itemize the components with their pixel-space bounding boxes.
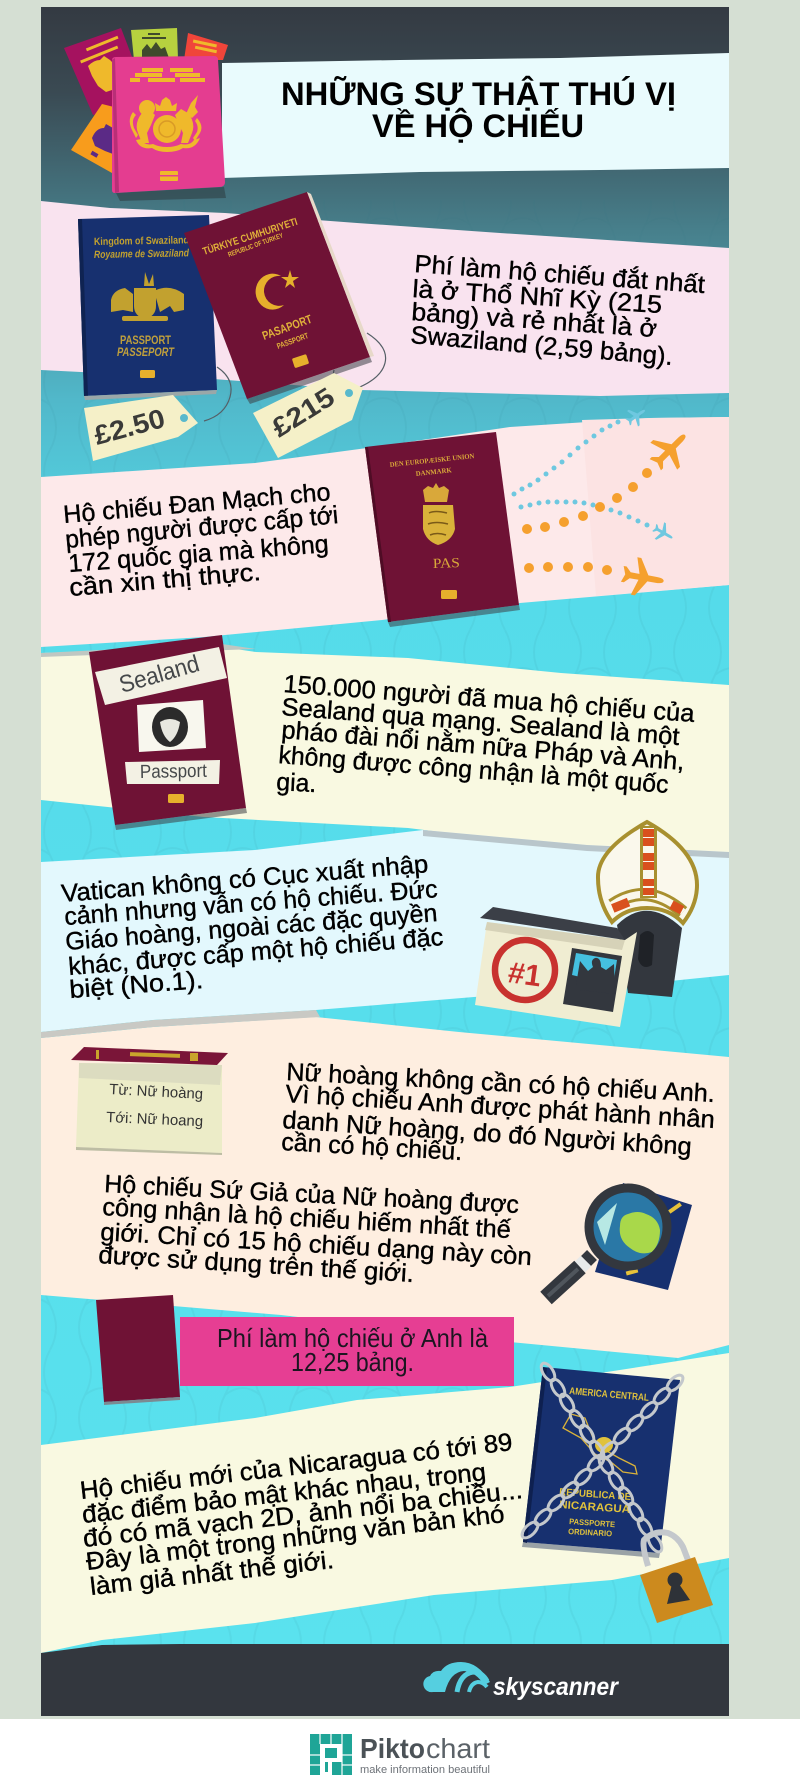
text: Sealand bbox=[276, 670, 696, 799]
text: Sealand: Sealand qua mạng. Sealand là một bbox=[281, 693, 681, 751]
text: Nicaragua: đó có mã vạch 2D, ảnh nổi ba chiều... bbox=[82, 1476, 524, 1553]
text: passport fees: Swaziland (2,59 bảng). bbox=[409, 321, 674, 371]
text: Denmark: Hộ chiếu Đan Mạch cho bbox=[62, 478, 332, 529]
icon: padlock bbox=[640, 1532, 713, 1623]
blue dotted route right bbox=[518, 500, 650, 528]
text: Nicaragua: đặc điểm bảo mật khác nhau, trong bbox=[81, 1458, 487, 1529]
text: Vatican: Giáo hoàng, ngoài các đặc quyền bbox=[64, 899, 438, 956]
text: Vatican bbox=[60, 850, 444, 1004]
icon: Nicaragua passport: REPUBLICA DE bbox=[559, 1487, 632, 1503]
icon: No.1 passport card: #1 bbox=[506, 956, 543, 994]
callout: UK passport fee: Phí làm hộ chiếu ở Anh là bbox=[217, 1323, 488, 1353]
text: passport fees: bảng) và rẻ nhất là ở bbox=[411, 298, 658, 343]
icon: Vatican passport bbox=[617, 911, 682, 997]
band: Nicaragua section bbox=[41, 1353, 729, 1653]
text: Sealand: 150.000 người đã mua hộ chiếu của bbox=[283, 670, 696, 728]
band: Denmark section bbox=[41, 417, 729, 647]
seal image bbox=[137, 700, 206, 752]
icon: Swaziland passport: Kingdom of Swaziland bbox=[94, 234, 189, 248]
icon: No.1 passport card bbox=[475, 907, 637, 1027]
callout: UK passport fee bbox=[96, 1295, 514, 1405]
royal crest bbox=[130, 95, 201, 152]
icon: Turkey passport: PASSPORT bbox=[276, 331, 310, 351]
text: Nicaragua: làm giả nhất thế giới. bbox=[89, 1546, 335, 1601]
icon: Turkey passport bbox=[184, 192, 374, 404]
icon: Turkey passport: REPUBLIC OF TURKEY bbox=[227, 232, 284, 259]
icon: Turkey passport: TÜRKIYE CUMHURIYETI bbox=[201, 215, 299, 258]
icon: Nicaragua passport: ORDINARIO bbox=[568, 1527, 612, 1538]
footer: Piktochart logo bbox=[310, 1733, 490, 1776]
text: Queen: danh Nữ hoàng, do đó Người không bbox=[282, 1106, 693, 1161]
flight paths and planes bbox=[512, 402, 698, 600]
text: Queen's Messenger passport bbox=[98, 1170, 533, 1288]
text: Queen: Nữ hoàng không cần có hộ chiếu Anh. bbox=[286, 1058, 716, 1108]
footer: Piktochart logo: chart bbox=[426, 1733, 490, 1764]
text: Denmark: phép người được cấp tới bbox=[64, 501, 339, 554]
icon: Denmark passport: DANMARK bbox=[415, 466, 453, 478]
logo: Skyscanner: skyscanner bbox=[493, 1673, 619, 1701]
band: title ribbon bbox=[222, 53, 729, 178]
text: Sealand: không được công nhận là một quốc bbox=[278, 741, 670, 799]
label: Sealand bbox=[95, 647, 227, 705]
icon: Piktochart mark bbox=[310, 1734, 352, 1775]
icon: passport stack bbox=[64, 28, 228, 201]
strings of price tags bbox=[204, 333, 386, 421]
band: fee section bbox=[41, 201, 729, 396]
text: Nicaragua: Đây là một trong những văn bản khó bbox=[84, 1500, 506, 1576]
icon: Nicaragua passport bbox=[522, 1367, 680, 1558]
icon: Nicaragua passport: NICARAGUA bbox=[559, 1499, 630, 1516]
icon: chains bbox=[519, 1361, 686, 1554]
icon: Swaziland passport: Royaume de Swaziland bbox=[94, 247, 190, 261]
icon: papal mitre bbox=[598, 822, 697, 923]
band: Queen section bbox=[41, 1017, 729, 1358]
icon: Denmark passport: PAS bbox=[433, 556, 460, 572]
text: Vatican: khác, được cấp một hộ chiếu đặc bbox=[67, 923, 444, 981]
price tag: £215 bbox=[253, 373, 363, 458]
text: Nicaragua bbox=[79, 1428, 524, 1601]
price tag: £2.50 bbox=[84, 395, 198, 461]
icon: Nicaragua passport: AMERICA CENTRAL bbox=[569, 1386, 649, 1404]
icon: Denmark passport: DEN EUROPÆISKE UNION bbox=[389, 452, 475, 469]
text: Queen: Vì hộ chiếu Anh được phát hành nhân bbox=[285, 1080, 716, 1134]
text: passport fees bbox=[409, 249, 706, 371]
price tag: £215: £215 bbox=[266, 382, 340, 443]
text: Vatican: biệt (No.1). bbox=[68, 966, 204, 1004]
text: Queen's Messenger passport: được sử dụng trên thế giới. bbox=[98, 1241, 415, 1288]
footer: Piktochart logo: Pikto bbox=[360, 1733, 425, 1764]
text: Sealand: pháo đài nổi nằm nữa Pháp và Anh, bbox=[281, 715, 686, 776]
price tag: £2.50: £2.50 bbox=[91, 403, 168, 451]
text: Queen's Messenger passport: Hộ chiếu Sứ Giả của Nữ hoàng được bbox=[104, 1170, 520, 1219]
text: Denmark bbox=[62, 478, 339, 602]
text: Sealand: gia. bbox=[276, 768, 317, 798]
icon: orange plane right bbox=[619, 555, 667, 600]
callout: UK passport fee: 12,25 bảng. bbox=[291, 1347, 414, 1377]
text: passport fees: Phí làm hộ chiếu đắt nhất bbox=[414, 249, 706, 299]
text: Vatican: cảnh nhưng vẫn có hộ chiếu. Đức bbox=[63, 874, 438, 931]
icon: blue plane right bbox=[649, 519, 677, 546]
icon: Queen letter card: Từ: Nữ hoàng bbox=[109, 1081, 204, 1103]
text: Queen's Messenger passport: công nhận là hộ chiếu hiếm nhất thế bbox=[102, 1193, 512, 1244]
text: Queen's Messenger passport: giới. Chỉ có 15 hộ chiếu dạng này còn bbox=[100, 1218, 533, 1271]
orange dotted route up bbox=[522, 468, 652, 534]
label: Passport: Passport bbox=[140, 761, 208, 783]
text: Queen bbox=[281, 1058, 716, 1166]
logo: Skyscanner bbox=[423, 1662, 619, 1701]
icon: Turkey passport: PASAPORT bbox=[260, 312, 314, 343]
text: Vatican: Vatican không có Cục xuất nhập bbox=[60, 850, 429, 908]
orange dotted route right bbox=[524, 562, 612, 575]
footer bar bbox=[41, 1644, 729, 1716]
icon: Queen letter card: Tới: Nữ hoang bbox=[106, 1109, 203, 1130]
icon: orange plane up bbox=[642, 422, 698, 478]
text: Denmark: 172 quốc gia mà không bbox=[67, 530, 330, 578]
blue dotted route up bbox=[512, 420, 620, 496]
icon: Sealand passport bbox=[89, 635, 247, 830]
icon: Queen letter card bbox=[71, 1047, 228, 1155]
text: Nicaragua: Hộ chiếu mới của Nicaragua có tới 89 bbox=[79, 1428, 514, 1505]
title bbox=[281, 76, 676, 144]
text: passport fees: là ở Thổ Nhĩ Kỳ (215 bbox=[412, 275, 663, 319]
icon: Denmark passport bbox=[365, 432, 520, 627]
text: Denmark: cần xin thị thực. bbox=[68, 558, 262, 602]
icon: Swaziland passport: PASSPORT bbox=[120, 333, 172, 347]
icon: Swaziland passport bbox=[78, 215, 217, 400]
text: Queen: cần có hộ chiếu. bbox=[281, 1128, 463, 1166]
icon: magnifier over blue passport bbox=[546, 1183, 692, 1298]
icon: Nicaragua passport: PASSPORTE bbox=[569, 1517, 616, 1529]
label: Sealand: Sealand bbox=[116, 650, 202, 699]
band: Sealand section bbox=[41, 647, 729, 853]
title: VỀ HỘ CHIẾU bbox=[372, 108, 584, 144]
band: Vatican section bbox=[41, 830, 729, 1032]
icon: Swaziland passport: PASSEPORT bbox=[117, 345, 175, 359]
footer: Piktochart logo: make information beautiful bbox=[360, 1764, 490, 1776]
icon: blue plane up bbox=[622, 402, 650, 430]
title: NHỮNG SỰ THẬT THÚ VỊ bbox=[281, 76, 676, 112]
